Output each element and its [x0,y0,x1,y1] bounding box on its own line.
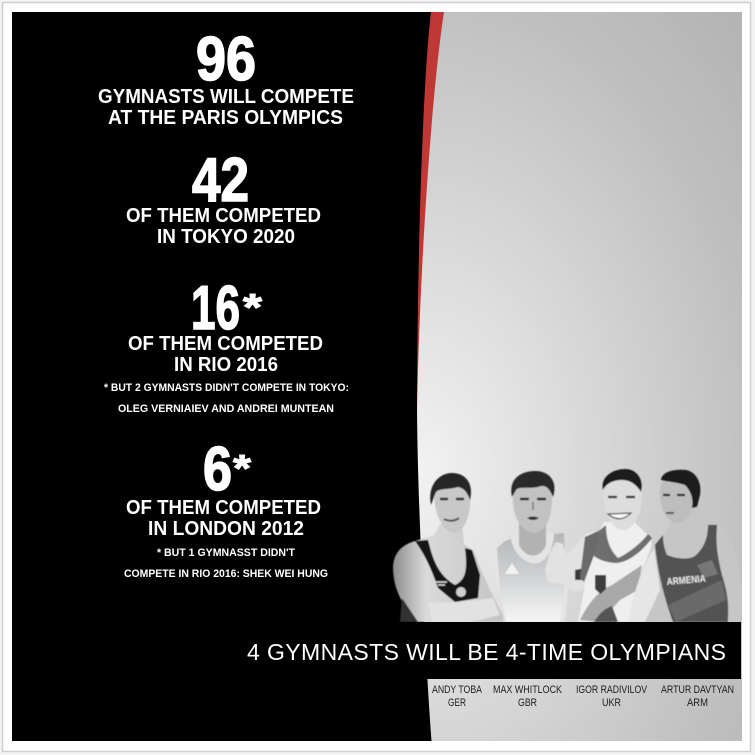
number 6 with asterisk: 6 [203,435,232,504]
name: Artur Davtyan: ARM [687,697,708,709]
heading lines: AT THE PARIS OLYMPICS [108,107,343,129]
footnote [124,547,328,580]
name: Max Whitlock [493,684,563,709]
name: Igor Radivilov: IGOR RADIVILOV [576,684,648,696]
gymnast: Igor Radivilov [545,469,652,622]
number 16 with asterisk: 16 [191,274,240,343]
banner text: 4 GYMNASTS WILL BE 4-TIME OLYMPIANS [247,639,726,665]
number 42: 42 [192,146,249,215]
gymnast: Artur Davtyan [630,468,729,622]
footnote: * BUT 2 GYMNASTS DIDN'T COMPETE IN TOKYO: [104,382,349,394]
name: Andy Toba [432,684,483,709]
heading lines: OF THEM COMPETED [126,497,321,519]
stat block: 16 in Rio [104,274,349,415]
gymnast: Andy Toba [393,473,503,622]
heading lines [98,86,354,129]
heading lines: GYMNASTS WILL COMPETE [98,86,354,108]
gymnast: Max Whitlock [496,470,568,622]
heading lines: IN TOKYO 2020 [157,226,295,248]
singlet lettering: ARMENIA [666,574,706,588]
footnote: OLEG VERNIAIEV AND ANDREI MUNTEAN [118,403,334,415]
number 96: 96 [196,25,256,94]
red curved accent [400,12,444,410]
name: Max Whitlock: GBR [518,697,537,709]
heading lines [126,497,321,540]
heading lines: IN RIO 2016 [174,354,278,376]
name: Max Whitlock: MAX WHITLOCK [493,684,563,696]
footnote [104,382,349,415]
black panel [12,12,432,741]
name labels [432,684,734,709]
name: Andy Toba: ANDY TOBA [432,684,483,696]
heading lines: OF THEM COMPETED [126,205,321,227]
stat block: 42 in Tokyo [126,146,321,248]
name: Artur Davtyan [661,684,734,709]
footnote: * BUT 1 GYMNASST DIDN'T [157,547,295,559]
footnote: COMPETE IN RIO 2016: SHEK WEI HUNG [124,568,328,580]
number 16 with asterisk: * [243,287,262,329]
heading lines: OF THEM COMPETED [128,333,323,355]
name: Igor Radivilov [576,684,648,709]
name: Igor Radivilov: UKR [602,697,621,709]
stat block: 6 in London [124,435,328,580]
gymnast photo group [393,469,742,622]
number 6 with asterisk: * [233,448,251,490]
heading lines: IN LONDON 2012 [148,518,304,540]
grey gradient panel [400,12,742,741]
name: Artur Davtyan: ARTUR DAVTYAN [661,684,734,696]
black banner [247,622,741,679]
heading lines [128,333,323,376]
heading lines [126,205,321,248]
stat block: 96 gymnasts [98,25,354,129]
name: Andy Toba: GER [448,697,466,709]
